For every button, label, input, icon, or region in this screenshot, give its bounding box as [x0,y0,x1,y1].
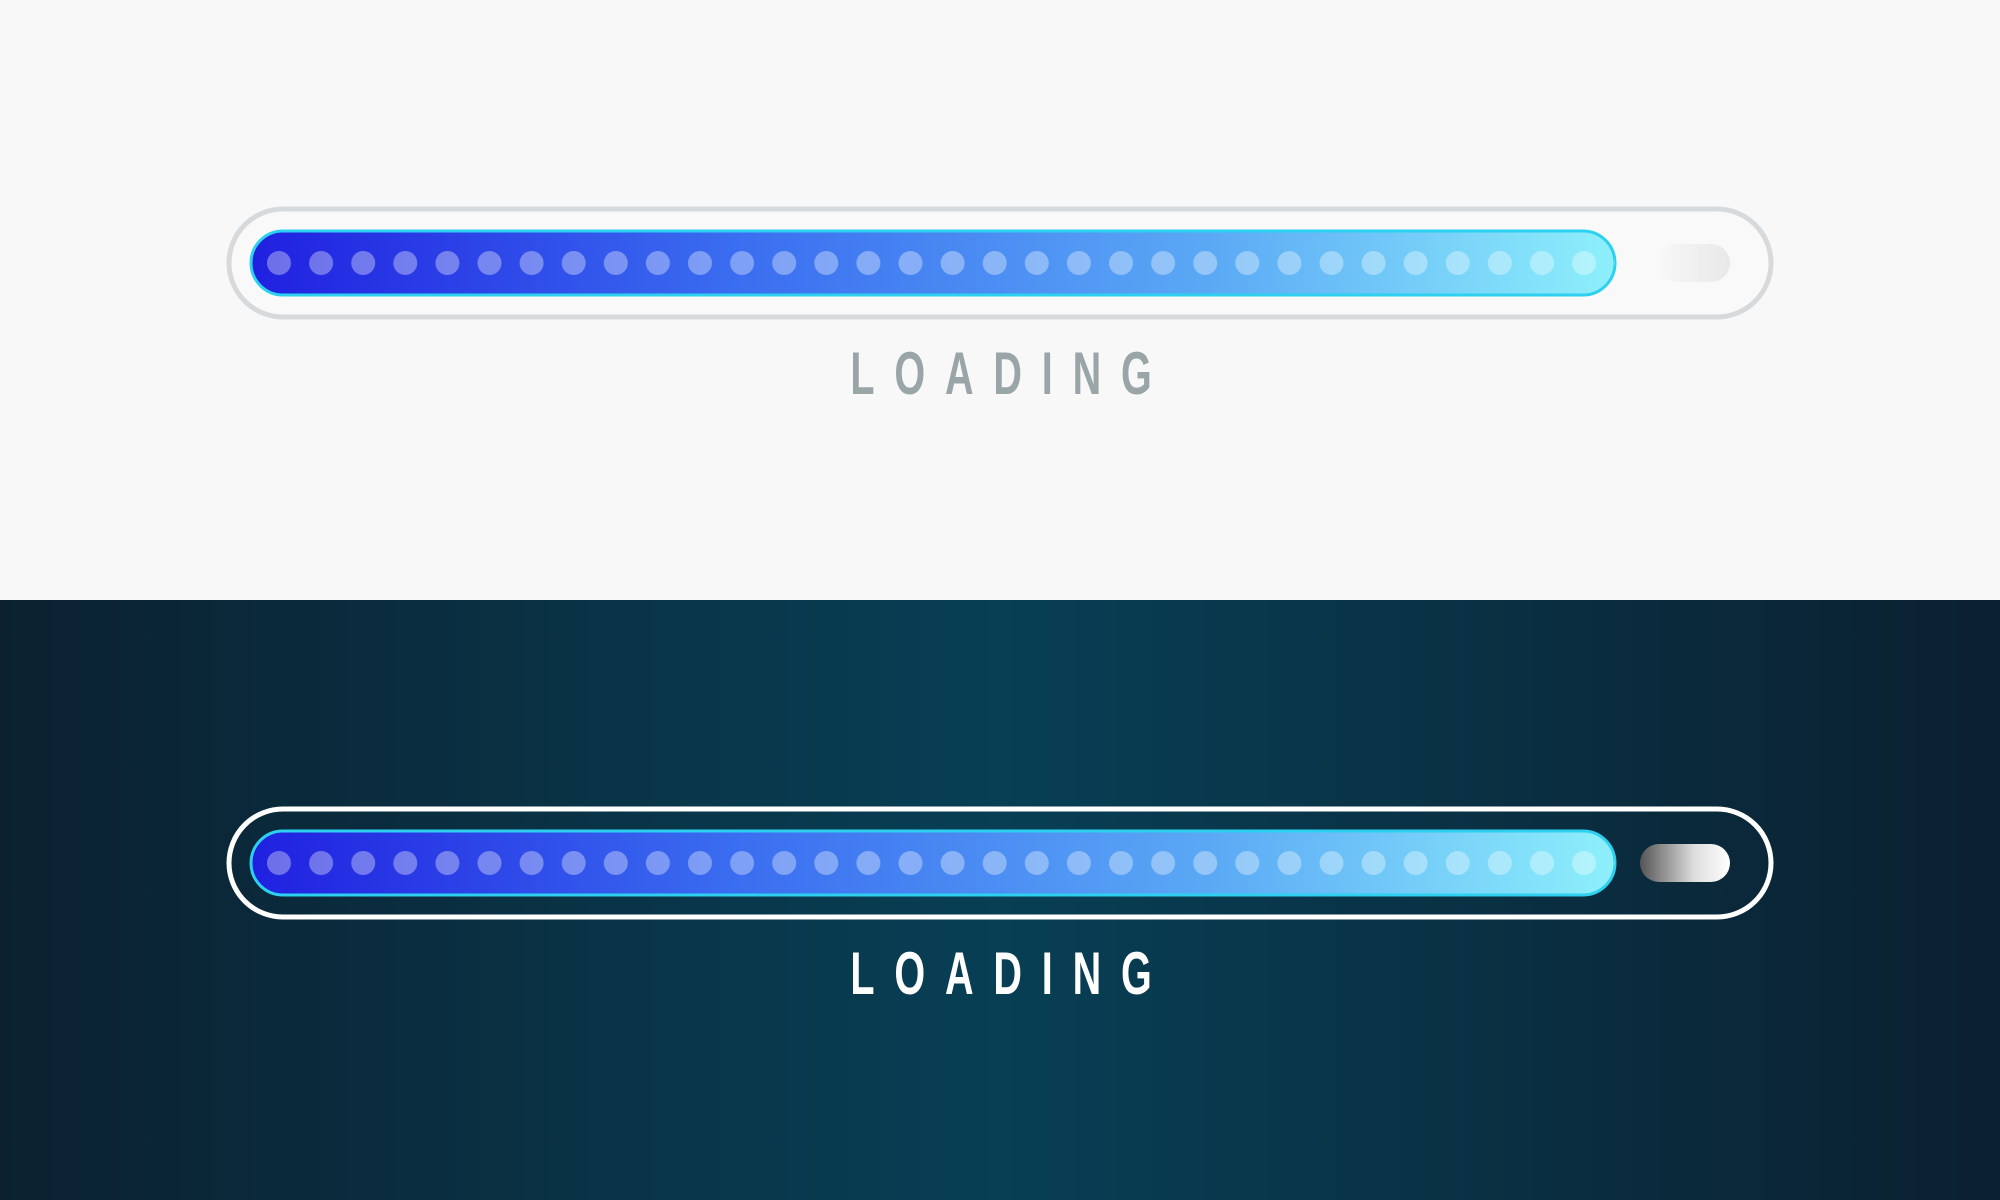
dark loading bar [229,809,1771,917]
dark loading label: LOADING [850,940,1172,1007]
light loading label: LOADING [850,340,1172,407]
light loading bar [229,209,1771,317]
panel: dark background [0,600,2000,1200]
panel: light background [0,0,2000,600]
